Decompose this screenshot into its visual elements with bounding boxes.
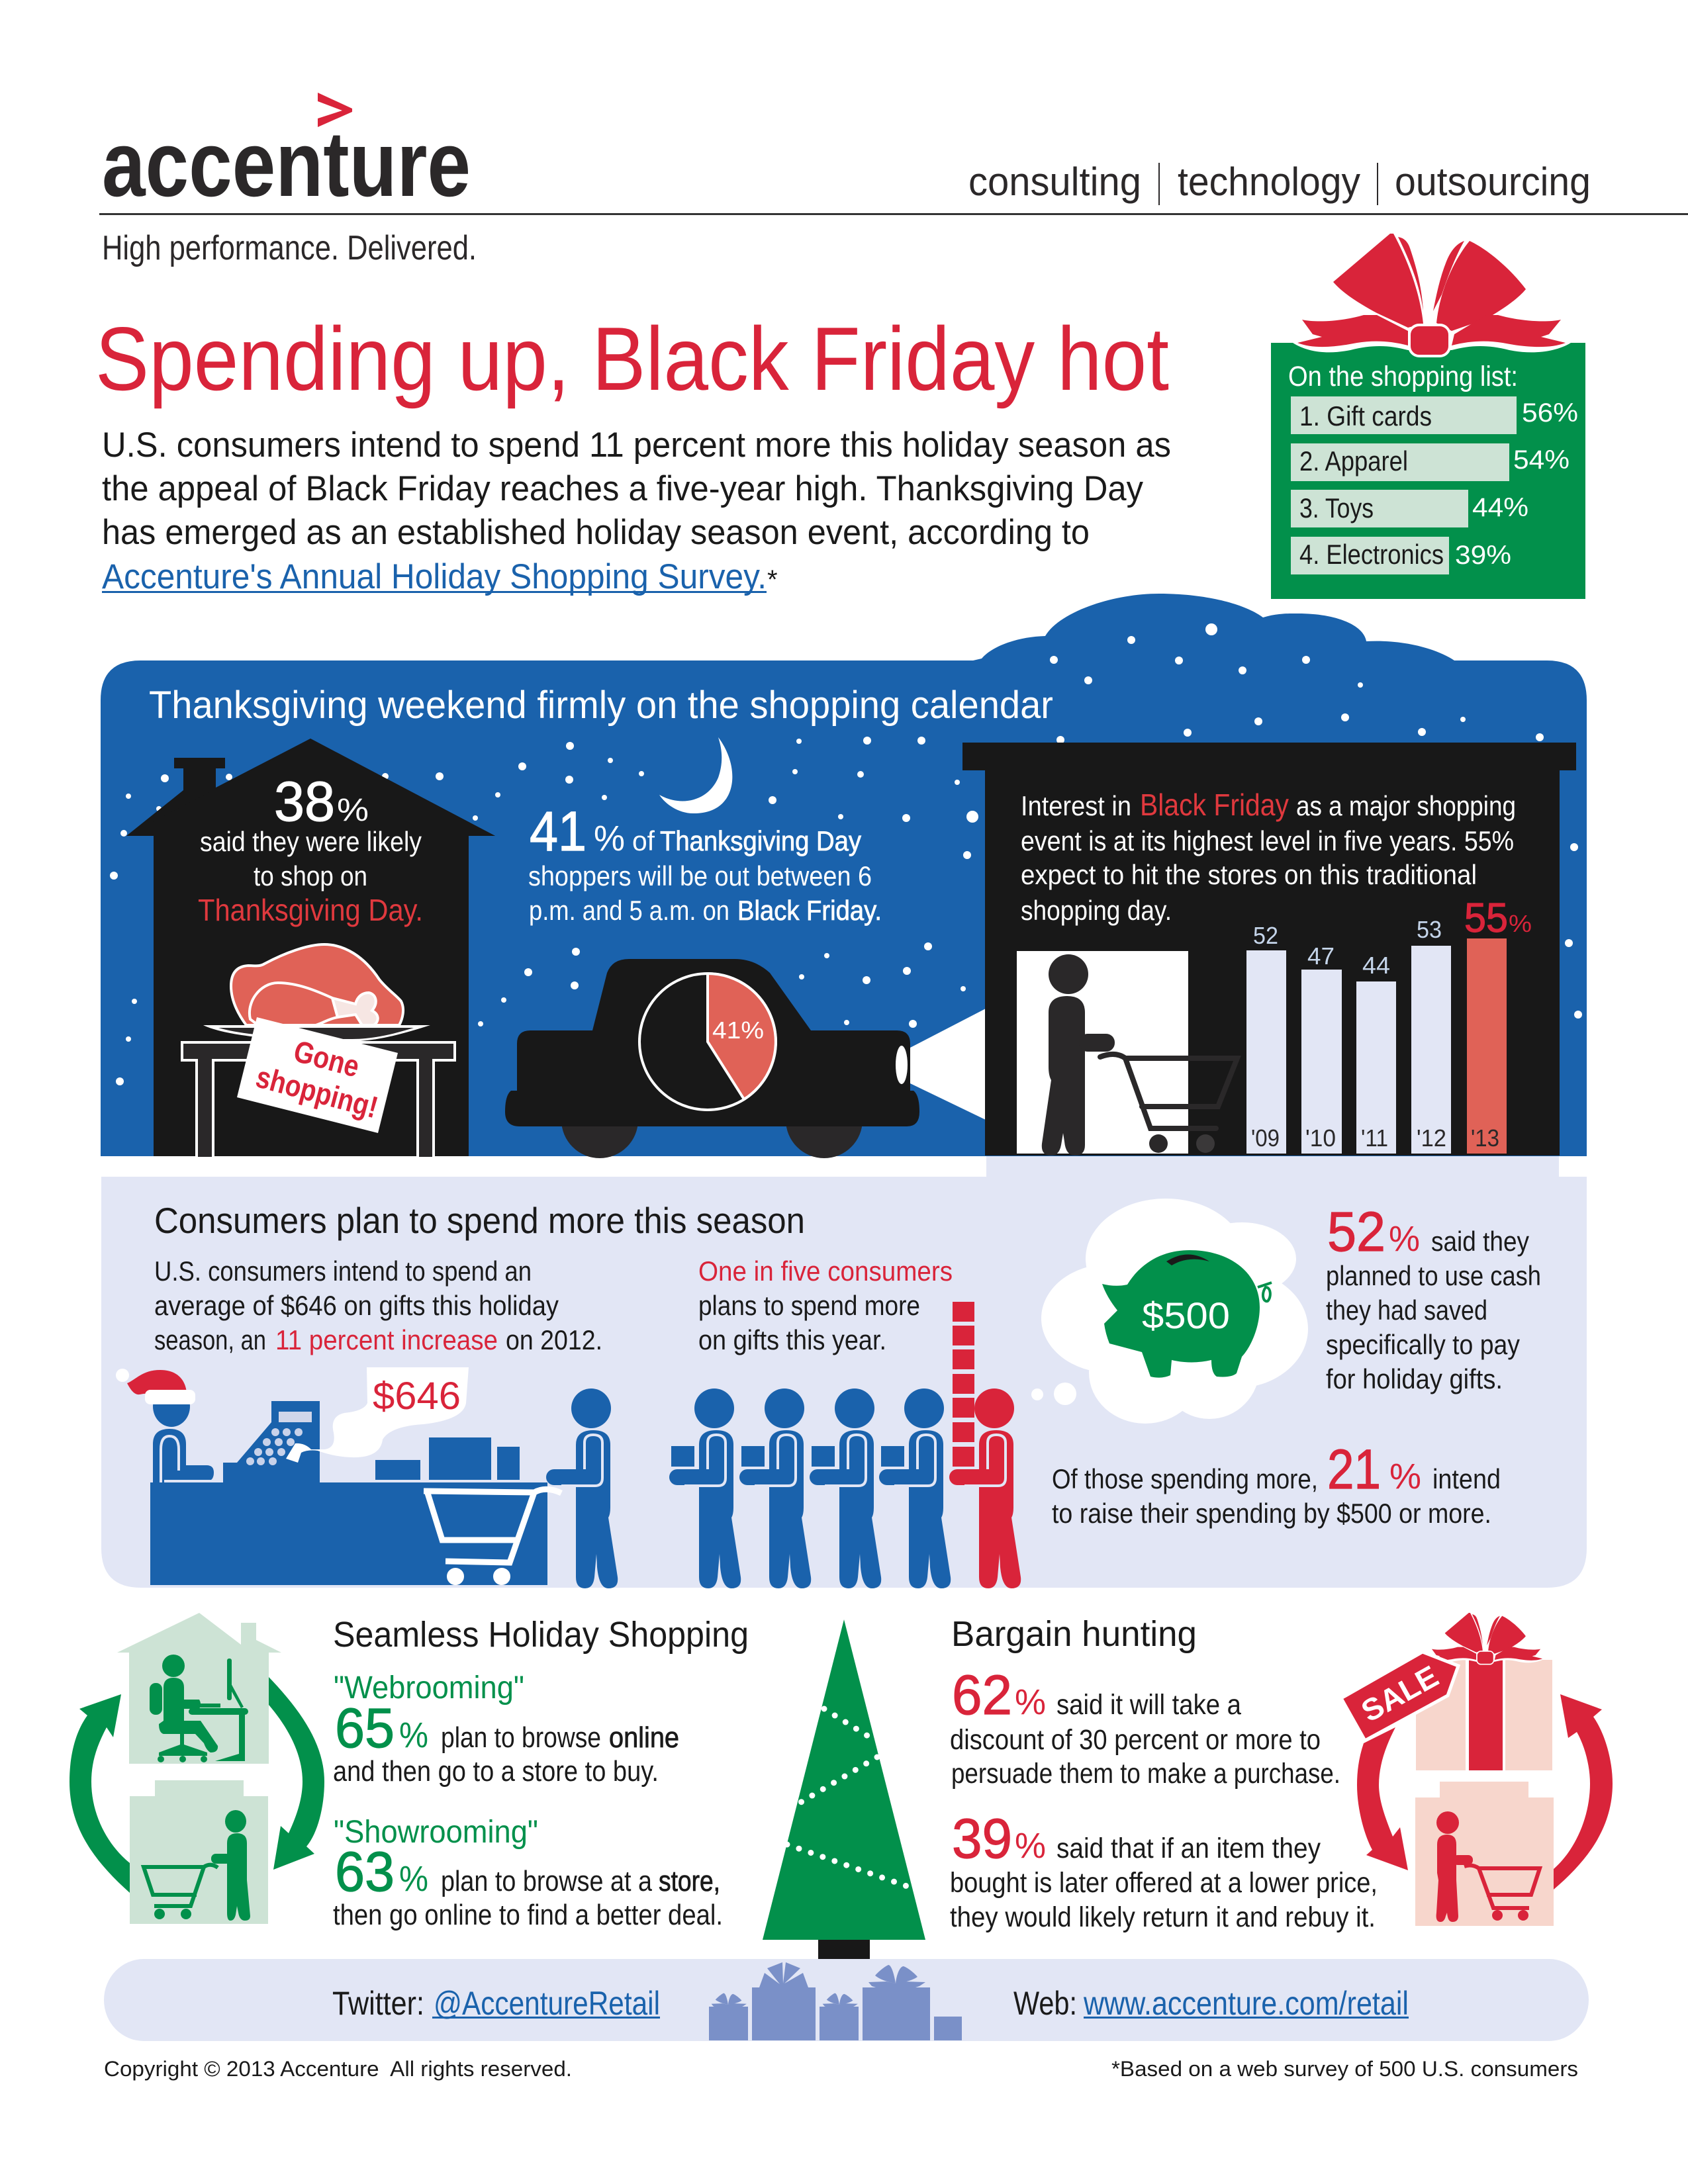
store text (1021, 788, 1516, 926)
sale tag (1341, 1652, 1458, 1741)
heading: Seamless Holiday Shopping (333, 1615, 749, 1655)
store text: as a major shopping (1296, 790, 1516, 821)
panel heading: Consumers plan to spend more this season (154, 1200, 805, 1241)
store text: expect to hit the stores on this traditional (1021, 859, 1477, 890)
bar chart: 53 (1417, 916, 1442, 943)
stat: 38 percent: % (337, 793, 369, 828)
showrooming: then go online to find a better deal. (333, 1899, 723, 1931)
showrooming: "Showrooming" (334, 1815, 538, 1850)
web link: Web: (1013, 1985, 1077, 2022)
bar chart: 55 (1464, 895, 1508, 941)
stat: 39 percent: % (1015, 1826, 1046, 1866)
section: bargain cycle graphic (1341, 1613, 1613, 1926)
stat: 62 percent: persuade them to make a purchase. (951, 1758, 1340, 1790)
right arrow (269, 1677, 324, 1870)
webrooming (333, 1670, 679, 1788)
icon: table (182, 1042, 455, 1158)
stat: 52 percent: for holiday gifts. (1326, 1363, 1503, 1394)
shopper with cart (1042, 954, 1237, 1156)
stat: 62 percent: discount of 30 percent or more to (950, 1724, 1321, 1756)
stat: 41 percent: shoppers will be out between 6 (528, 860, 872, 891)
panel: Thanksgiving weekend night sky (101, 594, 1587, 1158)
bar chart: '11 (1361, 1124, 1388, 1152)
list item: apparel: 2. Apparel (1299, 445, 1408, 477)
showrooming: 63 (335, 1841, 395, 1903)
stat: 21 percent: to raise their spending by $500 or more. (1052, 1498, 1491, 1529)
stat: 41 percent (528, 800, 882, 926)
stat: 39 percent: 39 (952, 1807, 1012, 1870)
list item: gift cards: 56% (1522, 398, 1578, 428)
showrooming: store, (659, 1865, 720, 1897)
stat: 52 percent: specifically to pay (1326, 1329, 1520, 1360)
sale tag: SALE (1356, 1659, 1444, 1729)
intro text block: U.S. consumers intend to spend 11 percent more this holiday season as (102, 426, 1171, 465)
survey footnote: *Based on a web survey of 500 U.S. consumers (1111, 2057, 1578, 2081)
stat: 39 percent: bought is later offered at a lower price, (950, 1867, 1378, 1899)
heading: Bargain hunting (951, 1614, 1197, 1654)
slogan: High performance. Delivered. (102, 229, 477, 267)
stat: 62 percent: said it will take a (1056, 1689, 1241, 1721)
showrooming (333, 1815, 723, 1931)
stat: 38 percent: 38 (274, 770, 335, 833)
icon: christmas tree (763, 1619, 925, 1960)
store text: Interest in (1021, 790, 1131, 821)
headlight (896, 1046, 908, 1084)
shopper 5 red (949, 1388, 1021, 1588)
list item: apparel: 54% (1513, 445, 1570, 475)
webrooming: % (399, 1715, 428, 1755)
bar chart: '13 (1471, 1124, 1499, 1152)
wrapping wave (1293, 334, 1571, 352)
intro text block: the appeal of Black Friday reaches a five-year high. Thanksgiving Day (102, 469, 1143, 508)
section: Seamless Holiday Shopping cycle graphic (70, 1613, 324, 1924)
stat: 52 percent: they had saved (1326, 1295, 1487, 1326)
list item: toys: 3. Toys (1299, 492, 1374, 523)
header tagline: consulting, technology, outsourcing: outsourcing (1395, 159, 1591, 204)
text: average spend: U.S. consumers intend to spend an (154, 1255, 532, 1287)
bar chart (1246, 895, 1532, 1154)
twitter link (332, 1985, 660, 2022)
shopper 2 (739, 1388, 811, 1588)
bar chart: '10 (1305, 1124, 1336, 1152)
bow (1297, 234, 1566, 356)
list item: toys: 44% (1472, 493, 1528, 522)
footer pill (104, 1959, 1589, 2041)
cash register counter (116, 1367, 618, 1588)
stat: 41 percent: Thanksgiving Day (660, 825, 861, 856)
stat: 62 percent: 62 (952, 1664, 1012, 1726)
cashier (116, 1369, 223, 1482)
stat: 62 percent (950, 1664, 1340, 1790)
shopper 3 (810, 1388, 881, 1588)
text: one in five: One in five consumers (698, 1255, 953, 1287)
store text: Black Friday (1140, 788, 1289, 822)
stat: 38 percent: to shop on (254, 860, 367, 891)
stat: 52 percent: % (1389, 1219, 1420, 1259)
shopping cart white (424, 1489, 561, 1581)
webrooming: and then go to a store to buy. (333, 1755, 659, 1788)
intro text block: * (767, 565, 778, 594)
store with red shopper (1415, 1782, 1554, 1926)
stat: 52 percent: planned to use cash (1326, 1260, 1541, 1291)
list heading: On the shopping list: (1288, 361, 1518, 392)
stat: 21 percent: Of those spending more, (1052, 1463, 1318, 1494)
stat: 41 percent: Black Friday. (737, 895, 882, 926)
shopper 1 (669, 1388, 741, 1588)
receipt bubble with amount: $646 (373, 1375, 461, 1418)
home with computer user (117, 1613, 281, 1764)
twitter link: @AccentureRetail (434, 1985, 660, 2022)
webrooming: "Webrooming" (334, 1670, 524, 1706)
left red arrow (1357, 1727, 1408, 1870)
stat: 38 percent: Thanksgiving Day. (198, 893, 423, 927)
gift box (1416, 1613, 1552, 1770)
stat: 38 percent: said they were likely (200, 826, 422, 857)
header tagline: consulting, technology, outsourcing: technology (1178, 159, 1360, 204)
left arrow (70, 1694, 130, 1893)
text block: Seamless Holiday Shopping (333, 1615, 749, 1931)
list item: electronics: 4. Electronics (1299, 539, 1444, 570)
stat: 52 percent (1326, 1201, 1541, 1394)
icon: piggy bank (1102, 1250, 1272, 1378)
store with bar chart (962, 743, 1576, 1156)
logo: accenture (102, 93, 471, 216)
queue of five shoppers (669, 1388, 1021, 1588)
thought bubble dots (1031, 1383, 1076, 1405)
intro text block (102, 426, 1171, 596)
bar chart: 47 (1307, 942, 1335, 970)
text block: Bargain hunting (950, 1614, 1378, 1933)
icon: plate (203, 1025, 430, 1042)
text: average spend: 11 percent increase (275, 1324, 498, 1355)
stat: 21 percent (1052, 1438, 1501, 1529)
icon: car with pie chart (505, 959, 919, 1158)
text: one in five: plans to spend more (698, 1290, 920, 1321)
house with turkey (126, 739, 495, 1158)
stat: 39 percent (950, 1807, 1378, 1933)
store text: shopping day. (1021, 895, 1172, 926)
note: gone shopping (237, 1017, 398, 1133)
counter (150, 1482, 547, 1585)
green box (1271, 343, 1585, 599)
list item: electronics (1291, 537, 1511, 574)
list item: gift cards (1291, 396, 1578, 434)
presents (709, 1962, 962, 2040)
right red arrow (1554, 1694, 1613, 1889)
header tagline: consulting, technology, outsourcing (968, 159, 1591, 205)
list item: apparel (1291, 443, 1570, 481)
stat: 52 percent: 52 (1327, 1201, 1385, 1263)
webrooming: 65 (335, 1697, 395, 1759)
pill background (104, 1959, 1589, 2041)
list item: gift cards: 1. Gift cards (1299, 400, 1432, 432)
stat: 41 percent: 41 (530, 800, 586, 862)
twitter link: Twitter: (332, 1985, 424, 2022)
logo wordmark: accenture (102, 112, 471, 216)
cash register (223, 1401, 320, 1482)
panel: shopping list gift box (1271, 234, 1585, 599)
logo chevron (318, 93, 352, 127)
bar chart: '12 (1417, 1124, 1446, 1152)
bar chart: 44 (1362, 952, 1390, 979)
text: one in five: on gifts this year. (698, 1324, 886, 1355)
receipt bubble with amount (286, 1367, 469, 1463)
red stack of gifts (953, 1302, 974, 1467)
store with cart shopper (130, 1780, 268, 1924)
pie chart 41 percent (639, 974, 776, 1110)
stat: 39 percent: they would likely return it and rebuy it. (950, 1901, 1376, 1933)
stat: 41 percent: % (594, 819, 625, 858)
list item: toys (1291, 490, 1528, 527)
thought bubble (1031, 1199, 1308, 1424)
blue sky with cloud (101, 594, 1587, 1156)
customer figure (546, 1388, 618, 1588)
icon: piggy bank: $500 (1142, 1295, 1230, 1336)
webrooming: plan to browse (441, 1721, 601, 1754)
panel: Consumers plan to spend more (101, 1156, 1587, 1588)
copyright: Copyright © 2013 Accenture All rights reserved. (104, 2057, 572, 2081)
text: one in five (698, 1255, 953, 1355)
intro text block: has emerged as an established holiday season event, according to (102, 513, 1090, 552)
icon: moon (659, 737, 732, 813)
stat: 62 percent: % (1015, 1682, 1046, 1722)
bar chart: 52 (1253, 922, 1278, 949)
stat: 21 percent: % (1389, 1457, 1421, 1496)
showrooming: % (399, 1859, 428, 1899)
stars (110, 623, 1582, 1085)
title: Spending up, Black Friday hot (95, 308, 1169, 409)
house silhouette (126, 739, 495, 1156)
intro text block: Accenture's Annual Holiday Shopping Survey. (102, 557, 767, 596)
note: gone shopping: shopping! (252, 1059, 381, 1124)
web link: www.accenture.com/retail (1083, 1985, 1409, 2022)
note: gone shopping: Gone (290, 1033, 363, 1084)
store text: event is at its highest level in five years. 55% (1021, 825, 1514, 856)
parcels (375, 1437, 520, 1480)
webrooming: online (609, 1721, 679, 1754)
icon: turkey (231, 944, 403, 1025)
stat: 21 percent: intend (1432, 1463, 1501, 1494)
text: average spend (154, 1255, 602, 1355)
cloud (1041, 1199, 1308, 1424)
bar chart: '09 (1251, 1124, 1280, 1152)
showrooming: plan to browse at a (441, 1865, 652, 1897)
pie chart 41 percent: 41% (712, 1017, 764, 1044)
stat: 41 percent: p.m. and 5 a.m. on (529, 895, 729, 926)
text: average spend: on 2012. (506, 1324, 602, 1355)
wheels (561, 1081, 638, 1158)
store door (1017, 951, 1188, 1154)
stat: 52 percent: said they (1431, 1226, 1529, 1257)
lavender background (101, 1156, 1587, 1588)
stat: 39 percent: said that if an item they (1056, 1833, 1321, 1864)
bar chart: % (1509, 910, 1532, 937)
text: average spend: average of $646 on gifts this holiday (154, 1290, 559, 1321)
header tagline: consulting, technology, outsourcing: consulting (968, 159, 1141, 204)
stat: 38 percent (198, 770, 423, 927)
icon: headlight beam (910, 1009, 986, 1120)
car body (505, 959, 919, 1126)
store silhouette (962, 743, 1576, 1156)
stat: 21 percent: 21 (1327, 1438, 1381, 1500)
stat: 41 percent: of (632, 825, 655, 856)
text: average spend: season, an (154, 1324, 266, 1355)
list item: electronics: 39% (1455, 541, 1511, 570)
shopper 4 (879, 1388, 951, 1588)
panel heading: Thanksgiving weekend firmly on the shopping calendar (149, 684, 1053, 727)
